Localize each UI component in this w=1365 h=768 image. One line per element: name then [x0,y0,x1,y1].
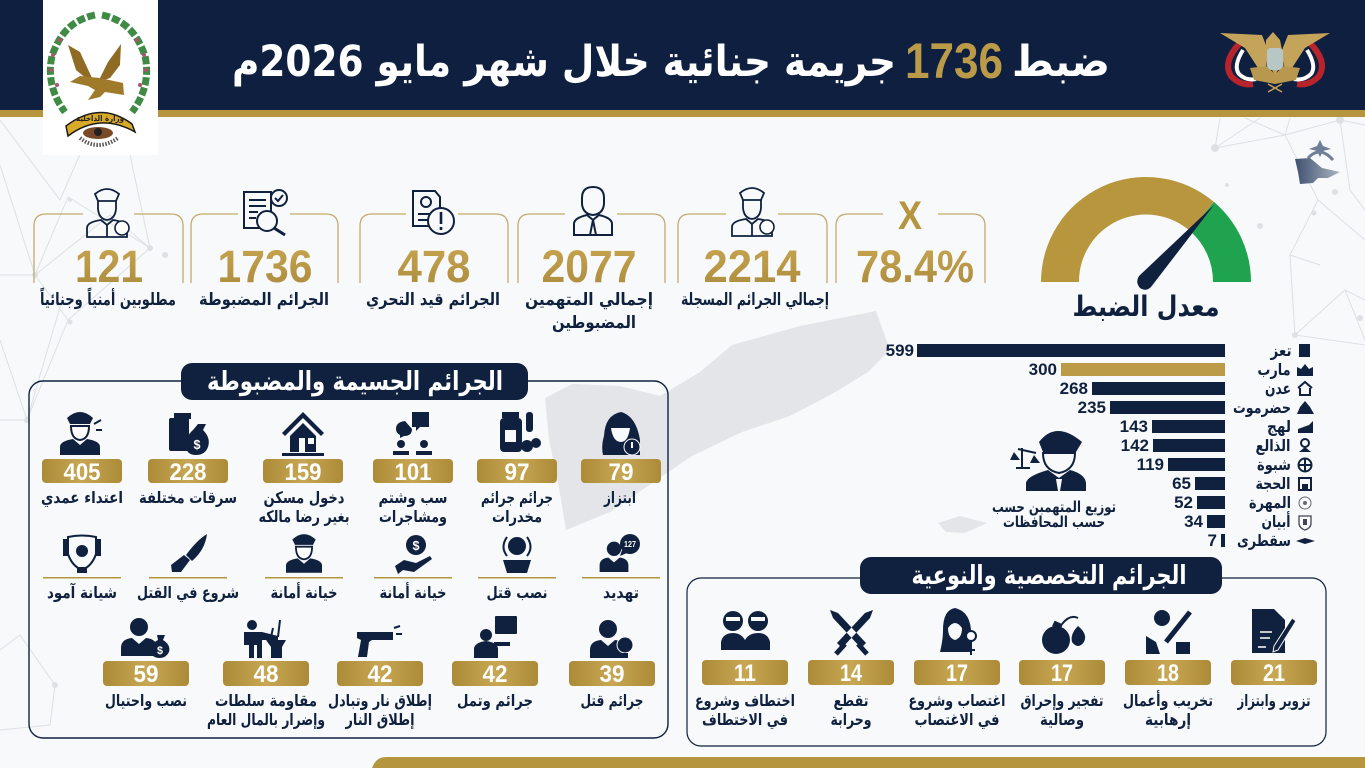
network pattern left [0,120,168,730]
heading: major crimes: الجرائم الجسيمة والمضبوطة [207,367,503,397]
bar: Dhale: الذالع [1256,436,1290,455]
KPI: wanted [34,189,183,310]
item: knife: شروع في القتل [137,583,239,603]
bar: Dhale: 142 [1121,436,1149,455]
network pattern right [1211,116,1365,345]
item: drugs 97: 97 [504,459,530,486]
item: fraud murder [478,537,556,602]
item: insults 101: سب وشتم [378,488,448,507]
item: crimes with gun 42: 42 [482,661,508,688]
item: forgery 21: 21 [1263,660,1285,687]
needle [1137,205,1214,290]
item: insults 101 [373,412,453,526]
item: bombing 17: وصالية [1040,710,1084,729]
item: rape 17: 17 [946,660,968,687]
KPI: accused seized: إجمالي المتهمين [525,290,653,310]
caption: distribution: حسب المحافظات [1003,513,1105,531]
bar: Socotra: سقطرى [1237,531,1291,550]
KPI: rate: 78.4% [856,241,974,292]
item: rape 17: اغتصاب وشروع [908,691,1006,710]
item: crimes with gun 42 [452,616,538,710]
bar: Marib [1029,360,1313,379]
item: gunfire 42: 42 [368,661,392,688]
bar: Hadramawt [1078,398,1314,417]
KPI: wanted: 121 [75,241,143,292]
item: shield: شيانة آمود [47,582,117,602]
KPI: under investigation: 478 [398,241,470,292]
item: kidnapping 11: في الاختطاف [702,710,788,730]
item: theft 228 [139,413,237,507]
KPI: seized crimes: الجرائم المضبوطة [199,290,329,310]
bar: Abyan: أبيان [1262,511,1290,531]
item: drugs 97: جرائم جرائم [481,488,553,507]
icon: X: X [898,194,922,238]
icon: small map with star [1295,140,1340,184]
item: shield [43,536,121,602]
icon: man with tie [574,187,612,235]
icon: masked officer [732,188,774,236]
item: bombing 17: تفجير وإحراق [1020,691,1104,710]
item: resisting 48: 48 [254,661,278,688]
title: جريمة جنائية خلال شهر مايو 2026م [232,37,896,87]
item: threat [582,534,660,602]
icon: officer with scales [1010,431,1086,491]
bar: Lahj [1120,417,1313,436]
icon: report with alert [413,191,454,234]
item: forgery 21 [1231,609,1317,710]
item: resisting 48: وإضرار بالمال العام [207,710,325,729]
bar: Taiz: 599 [886,341,914,360]
bar: Hajjah [1172,474,1311,493]
caption: distribution: توزيع المتهمبن حسب [992,498,1116,516]
item: home entry 159: 159 [284,459,322,486]
item: bombing 17 [1019,617,1105,729]
item: extortion 79: 79 [608,459,634,486]
bar: Hadramawt: 235 [1078,398,1106,417]
item: gunfire 42: إطلاق نار وتبادل [328,691,432,710]
item: swords 14: 14 [840,660,863,687]
item: terror 18: تخريب وأعمال [1123,690,1213,710]
bar: Abyan: 34 [1184,512,1204,531]
item: resisting 48 [207,620,325,729]
emblem: Yemen eagle [1220,32,1330,92]
bar chart: accused by governorate [886,341,1315,550]
item: insults 101: 101 [394,459,432,486]
item: hand with coin: $ [412,538,420,553]
KPI: registered crimes: 2214 [704,241,800,292]
heading: specialised crimes: الجرائم التخصصية والنوعية [912,561,1186,591]
item: hand with coin [374,535,452,602]
item: threat: تهديد [603,583,639,602]
item: forgery 21: تزوير وابتزاز [1237,691,1310,710]
item: rape 17 [908,608,1006,730]
KPI: registered crimes: إجمالي الجرائم المسجلة [681,290,829,310]
item: hand with coin: خيانة أمانة [380,582,446,602]
caption: distribution [992,498,1116,531]
bar: Dhale [1121,436,1311,455]
item: theft 228: 228 [170,459,206,486]
bar: Taiz: تعز [1270,341,1292,360]
item: officer breach [265,534,343,602]
item: home entry 159: بغير رضا مالكه [258,507,350,526]
bar: Aden: عدن [1265,379,1291,398]
item: drugs 97: مخدرات [492,507,542,526]
logo: Ministry of Interior: وزارة الداخلية [76,114,124,123]
icon: officer with star [87,189,129,237]
item: assault 405 [41,412,123,508]
bar: Hajjah: الحجة [1256,474,1290,493]
item: fraud 59 [103,618,189,710]
KPI: accused seized: المضبوطين [552,313,636,333]
gauge: seizure rate: معدل الضبط [1072,290,1220,323]
item: drugs 97 [477,412,557,526]
item: kidnapping 11 [695,611,795,730]
logo: Ministry of Interior [43,0,158,155]
bar: Socotra: 7 [1208,531,1217,550]
item: theft 228: سرقات مختلفة [139,488,237,507]
item: terror 18: إرهابية [1145,710,1191,729]
item: threat: 127 [624,540,636,549]
bar: Hajjah: 65 [1172,474,1191,493]
item: home entry 159 [258,412,350,526]
item: kidnapping 11: 11 [734,660,756,687]
bar: Socotra [1208,531,1315,550]
item: home entry 159: دخول مسكن [264,488,344,507]
item: kidnapping 11: اختطاف وشروع [695,691,795,710]
item: theft 228: $ [194,437,201,452]
item: swords 14: وحرابة [830,710,872,729]
item: fraud 59: 59 [134,661,158,688]
bar: Hadramawt: حضرموت [1233,398,1291,417]
item: officer breach: خيانة أمانة [270,582,338,602]
item: murder 39 [569,620,655,710]
bar: Lahj: 143 [1120,417,1148,436]
item: fraud 59: نصب واحتيال [105,691,187,710]
KPI: under investigation: الجرائم قيد التحري [366,290,500,310]
KPI: rate [836,194,985,292]
header band [0,0,1365,117]
KPI: accused seized: 2077 [542,241,636,292]
bar: Shabwa: شبوة [1257,455,1291,474]
item: assault 405: 405 [64,459,100,486]
bar: Taiz [886,341,1310,360]
item: fraud murder: نصب قتل [486,583,548,602]
KPI: wanted: مطلوبين أمنياً وجنائياً [40,286,176,310]
panel: major crimes [29,363,668,738]
bar: Abyan [1184,511,1311,531]
item: extortion 79 [581,412,661,507]
item: swords 14: تقطع [834,691,868,710]
bar: Aden [1060,379,1312,398]
item: terror 18: 18 [1157,660,1179,687]
bar: Shabwa: 119 [1137,455,1164,474]
panel: specialised crimes [687,557,1326,746]
item: murder 39: جرائم قتل [580,691,644,710]
item: murder 39: 39 [600,661,624,688]
item: fraud 59: $ [157,645,163,657]
footer strip [372,757,1365,768]
item: assault 405: اعتداء عمدي [41,488,123,508]
heading: specialised crimes [860,557,1222,594]
KPI: registered crimes [678,188,829,310]
KPI: accused seized [518,187,665,333]
item: knife [137,534,239,603]
bar: Lahj: لهج [1267,417,1291,436]
item: swords 14 [808,610,894,729]
bar: Shabwa [1137,455,1312,474]
item: rape 17: في الاغتصاب [914,710,1000,730]
item: terror 18 [1123,610,1213,729]
KPI: under investigation [360,191,508,310]
item: extortion 79: ابتزاز [603,488,636,507]
item: gunfire 42 [328,626,432,729]
item: bombing 17: 17 [1051,660,1073,687]
bar: Mahra: المهرة [1249,493,1291,512]
title: ضبط [1012,37,1110,87]
item: gunfire 42: إطلاق النار [345,710,414,729]
bar: Marib: مارب [1258,360,1290,379]
KPI: seized crimes: 1736 [218,241,312,292]
title: 1736 [905,33,1003,89]
gauge: seizure rate [1041,177,1251,323]
KPI: seized crimes [191,190,338,310]
map: Yemen silhouette [545,311,987,533]
bar: Aden: 268 [1060,379,1088,398]
item: insults 101: ومشاجرات [379,507,447,526]
item: resisting 48: مقاومة سلطات [215,691,317,710]
icon: document with magnifier [244,190,287,235]
bar: Mahra [1174,493,1311,512]
bar: Marib: 300 [1029,360,1057,379]
item: crimes with gun 42: جرائم وتمل [457,691,533,710]
bar: Mahra: 52 [1174,493,1193,512]
heading: major crimes [181,363,528,400]
